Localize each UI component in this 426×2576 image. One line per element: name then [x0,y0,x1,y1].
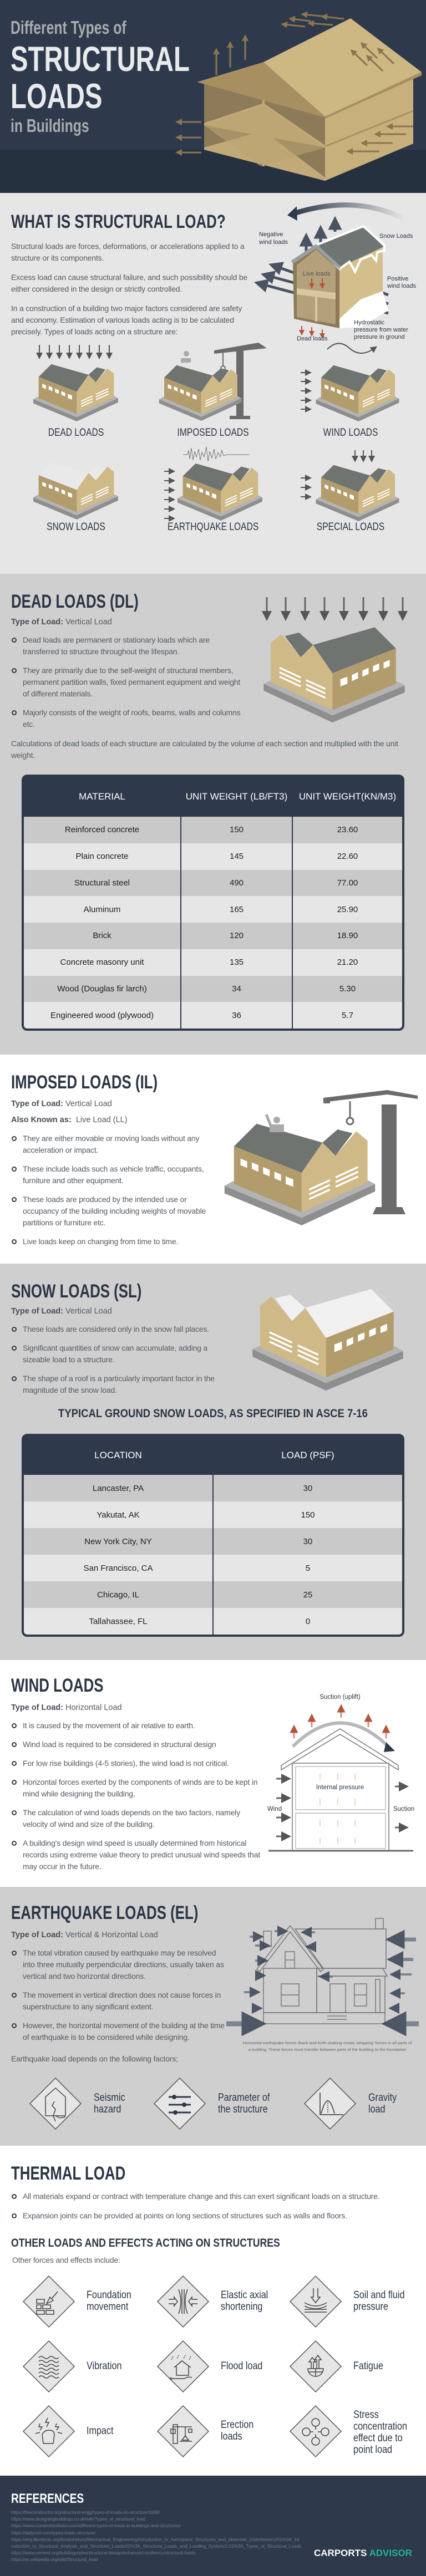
factor: gravity load: load [368,2104,386,2115]
table: snow loads: 5 [306,1564,310,1572]
bullets: thermal: Expansion joints can be provided at points on long sections of structures such as walls and floors. [23,2211,347,2220]
text: reference links: https://www.designingbuildings.co.uk/wiki/Types_of_structural_load [11,2516,145,2522]
item: vibration [23,2340,121,2392]
bullets: snow loads: Significant quantities of snow can accumulate, adding a sizeable load to a structure. [23,1343,207,1364]
label: special loads: SPECIAL LOADS [317,521,384,533]
text block: definition [11,242,247,336]
item: elastic axial shortening: Elastic axial [221,2289,268,2301]
bullets: dead loads: They are primarily due to the self-weight of structural members, permanent partition walls, fixed permanent equipment and weight of different materials. [23,666,240,698]
table: unit weights: Structural steel [74,878,130,888]
bullets: wind loads: The calculation of wind loads depends on the two factors, namely velocity of wind and size of the building. [23,1808,240,1829]
factor: parameter of the structure: Parameter of [218,2092,270,2104]
table: snow loads: Chicago, IL [97,1590,139,1599]
table: unit weights: UNIT WEIGHT (LB/FT3) [186,791,287,802]
diagram: wind pressure house: Suction [393,1806,414,1813]
bullets: imposed loads: They are either movable or moving loads without any acceleration or impact. [23,1134,199,1154]
heading: dead loads: DEAD LOADS (DL) [11,591,139,612]
diagram: house with load labels: wind loads [387,283,416,289]
table: unit weights: 22.60 [337,852,358,861]
subheading: ground snow loads: TYPICAL GROUND SNOW LOADS, AS SPECIFIED IN ASCE 7-16 [58,1407,368,1420]
diagram: earthquake house: Horizontal earthquake forces (back-and-forth shaking croats 'whipping' forces in all parts of [243,2040,412,2045]
label: snow loads: SNOW LOADS [47,521,105,533]
text: type of load: Type of Load: Vertical Load [11,618,112,627]
diagram: wind pressure house: Internal pressure [316,1784,364,1791]
icon: imposed loads [159,343,267,421]
table: unit weights: 145 [230,852,244,861]
factor: seismic hazard [29,2078,125,2130]
diagram: house with load labels [254,202,416,342]
text block: definition: Structural loads are forces, deformations, or accelerations applied to a structure or its components. [11,242,245,262]
item: stress concentration: point load [353,2444,392,2456]
text: reference links: https://en.wikipedia.org/wiki/Structural_load [11,2557,98,2562]
item: soil and fluid pressure [290,2275,404,2328]
diagram: house with load labels: Snow Loads [379,233,413,240]
diagram: wind pressure house: Wind [267,1806,282,1813]
text block: definition: In a construction of a building two major factors considered are safety and economy. Estimation of various loads acting is to be calculated precisely. Types of loads acting on a structure are: [11,304,242,336]
bullets: imposed loads: Live loads keep on changing from time to time. [23,1237,178,1246]
bullets: wind loads [12,1721,261,1871]
illustration: imposed building with crane [224,1090,418,1225]
label: imposed loads: IMPOSED LOADS [177,427,248,439]
item: impact [23,2405,113,2457]
diagram: house with load labels: Hydrostatic [354,319,385,326]
heading: wind loads: WIND LOADS [11,1675,104,1696]
bullets: earthquake: However, the horizontal movement of the building at the time of earthquake is to be considered while designing. [23,2021,225,2042]
table: snow loads: 30 [303,1537,312,1546]
table: snow loads: 0 [306,1617,310,1626]
table: snow loads: San Francisco, CA [83,1564,153,1572]
title: in Buildings [11,115,89,136]
item: elastic axial shortening: shortening [221,2301,262,2313]
heading: what is structural load: WHAT IS STRUCTURAL LOAD? [11,211,226,232]
title: Different Types of [11,17,126,38]
text: factors intro: Earthquake load depends on the following factors; [11,2054,178,2063]
item: flood load: Flood load [221,2360,262,2372]
item: vibration: Vibration [87,2360,121,2372]
section: what is structural load [0,193,426,574]
heading: snow loads: SNOW LOADS (SL) [11,1281,141,1302]
bullets: thermal [12,2192,380,2220]
text: type of load: Type of Load: Vertical Load [11,1307,112,1316]
table: unit weights: UNIT WEIGHT(KN/M3) [299,791,396,802]
bullets: wind loads: Wind load is required to be considered in structural design [23,1740,216,1749]
text: reference links: https://www.cement.org/buildingcodes/structural-design/enhanced-resiliency/structural-loads [11,2550,195,2555]
bullets: wind loads: For low rise buildings (4-5 stories), the wind load is not critical. [23,1759,229,1768]
factor: gravity load [304,2078,397,2130]
bullets: imposed loads: These include loads such as vehicle traffic, occupants, furniture and other equipment. [23,1164,204,1185]
table: unit weights: Brick [93,931,111,940]
text: reference links: https://dailycivil.com/types-loads-structure/ [11,2530,95,2536]
item: foundation movement: movement [87,2301,128,2313]
item: erection loads [157,2405,253,2457]
table: snow loads: Yakutat, AK [97,1510,140,1519]
table: snow loads [22,1434,404,1637]
item: fatigue [290,2340,383,2392]
bullets: dead loads: Majorly consists of the weight of roofs, beams, walls and columns etc. [23,708,240,729]
illustration: snow building [252,1289,403,1391]
table: snow loads: 30 [303,1484,312,1493]
title: STRUCTURAL [11,40,190,79]
table: unit weights [22,775,404,1031]
diagram: earthquake house: a building. These forces must transfer between parts of the building to the foundation [248,2047,406,2052]
item: soil and fluid pressure: Soil and fluid [353,2289,404,2301]
title [11,17,190,136]
item: foundation movement [23,2275,131,2328]
icon: earthquake loads [164,447,262,521]
heading: thermal load: THERMAL LOAD [11,2163,125,2184]
table: unit weights: 18.90 [337,931,358,940]
table: unit weights: 34 [232,984,241,994]
table: snow loads: Tallahassee, FL [89,1617,148,1626]
diagram: earthquake house [226,1918,419,2052]
table: unit weights: 77.00 [337,878,358,888]
text: type and alias: Type of Load: Vertical Load [11,1099,112,1108]
item: elastic axial shortening [157,2275,268,2328]
table: unit weights: MATERIAL [79,791,125,802]
footer: references [0,2476,426,2576]
table: snow loads: 25 [303,1590,312,1599]
bullets: earthquake: The total vibration caused by earthquake may be resolved into three mutually perpendicular directions, usually taken as vertical and two horizontal directions. [23,1948,224,1981]
bullets: thermal: All materials expand or contract with temperature change and this can exert significant loads on a structure. [23,2192,380,2201]
item: erection loads: loads [221,2431,242,2442]
table: unit weights: Reinforced concrete [65,825,139,834]
table: unit weights: 135 [230,958,244,967]
diagram: house with load labels: Dead loads [297,335,328,342]
illustration: dead loads building [262,597,408,722]
table: unit weights: 21.20 [337,958,358,967]
icon: special loads [301,450,399,521]
section: earthquake loads [0,1887,426,2146]
table: snow loads: New York City, NY [84,1537,152,1546]
bullets: imposed loads: These loads are produced by the intended use or occupancy of the building including weights of movable partitions or furniture etc. [23,1195,206,1227]
table: unit weights: 120 [230,931,244,940]
table: snow loads: LOAD (PSF) [281,1450,334,1460]
item: impact: Impact [87,2425,113,2437]
bullets: imposed loads [12,1134,206,1246]
table: snow loads: Lancaster, PA [93,1484,144,1493]
text: type and alias: Also Known as: Live Load (LL) [11,1116,128,1124]
text: calculation: Calculations of dead loads of each structure are calculated by the volume of each section and multiplied with the unit weight. [11,739,398,760]
icon: snow loads [33,467,118,520]
text: reference links: https://eng.libretexts.org/Bookshelves/Mechanical_Engineering/Introduction_to_Aerospace_Structures_and_Materials_(Alderliesten)/01%3A_Int [11,2537,300,2542]
diagram: house with load labels: pressure in ground [354,334,405,340]
table: unit weights: 5.7 [342,1011,353,1020]
item: stress concentration: concentration [353,2421,407,2432]
heading: earthquake loads: EARTHQUAKE LOADS (EL) [11,1902,198,1923]
section: snow loads [0,1264,426,1660]
item: foundation movement: Foundation [87,2289,131,2301]
text: type of load: Type of Load: Horizontal Load [11,1703,122,1712]
bullets: dead loads [12,635,241,729]
table: unit weights: 5.30 [339,984,356,994]
diagram: wind pressure house: Suction (uplift) [320,1694,361,1701]
table: unit weights: 36 [232,1011,241,1020]
bullets: snow loads: The shape of a roof is a particularly important factor in the magnitude of the snow load. [23,1374,215,1394]
bullets: wind loads: Horizontal forces exerted by the components of winds are to be kept in mind while designing the building. [23,1778,257,1798]
table: unit weights: 490 [230,878,244,888]
diagram: wind pressure house [267,1694,414,1852]
text: reference links: https://theconstructor.org/structural-engg/types-of-loads-on-structure/1698/ [11,2509,160,2515]
factor: gravity load: Gravity [368,2092,397,2104]
item: flood load [157,2340,262,2392]
table: unit weights: 23.60 [337,825,358,834]
header section [0,0,426,193]
bullets: wind loads: A building's design wind speed is usually determined from historical records using extreme value theory to predict unusual wind speeds that may occur in the future. [23,1839,260,1871]
diagram: house with load labels: Live loads [303,271,331,277]
item: stress concentration: effect due to [353,2432,403,2444]
text: reference links: roduction_to_Structural_Analysis_and_Structural_Loads/02%3A_Structural_Loads_and_Loading_System/2.01%3A_Types_of_Structural_Loads [11,2543,301,2549]
illustration: header house [175,11,422,181]
diagram: house with load labels: pressure from water [354,327,408,333]
label: wind loads: WIND LOADS [323,427,378,439]
item: soil and fluid pressure: pressure [353,2301,388,2313]
table: unit weights: Plain concrete [75,852,129,861]
subheading: other loads: OTHER LOADS AND EFFECTS ACTING ON STRUCTURES [11,2237,280,2249]
table: unit weights: Engineered wood (plywood) [50,1011,154,1020]
diagram: house with load labels: Negative [259,231,283,238]
table: unit weights: Aluminum [84,905,120,914]
text: other forces intro: Other forces and effects include: [12,2256,120,2264]
heading: references: REFERENCES [11,2491,84,2506]
icon: dead loads [33,345,118,421]
logo: carports advisor: CARPORTS ADVISOR [314,2548,412,2558]
table: unit weights: 150 [230,825,244,834]
table: unit weights: Concrete masonry unit [60,958,144,967]
grid: other loads [23,2275,407,2457]
label: dead loads: DEAD LOADS [48,427,104,439]
factor: parameter of the structure: the structure [218,2104,268,2115]
factor: seismic hazard: Seismic [94,2092,125,2104]
heading: imposed loads: IMPOSED LOADS (IL) [11,1072,158,1093]
item: fatigue: Fatigue [353,2360,383,2372]
bullets: earthquake [12,1948,225,2042]
item: stress concentration [290,2405,407,2457]
label: earthquake loads: EARTHQUAKE LOADS [168,521,258,533]
table: unit weights: 25.90 [337,905,358,914]
icon: wind loads [301,343,399,421]
bullets: dead loads: Dead loads are permanent or stationary loads which are transferred to structure throughout the lifespan. [23,635,210,656]
section: dead loads [0,574,426,1055]
bullets: snow loads [12,1325,215,1394]
factor: seismic hazard: hazard [94,2104,121,2115]
text block: definition: Excess load can cause structural failure, and such possibility should be either considered in the design or strictly controlled. [11,273,247,293]
table: unit weights: Wood (Douglas fir larch) [57,984,147,994]
bullets: earthquake: The movement in vertical direction does not cause forces in superstructure to any significant extent. [23,1990,221,2011]
text: reference links: https://www.constrofacilitator.com/different-types-of-loads-in-buildings-and-structures/ [11,2523,181,2528]
bullets: snow loads: These loads are considered only in the snow fall places. [23,1325,209,1333]
table: snow loads: 150 [301,1510,315,1519]
table: unit weights: 165 [230,905,244,914]
text: reference links [11,2509,301,2562]
text: type and alias [11,1099,128,1124]
diagram: house with load labels: Positive [387,276,409,282]
bullets: wind loads: It is caused by the movement of air relative to earth. [23,1721,195,1730]
title: LOADS [11,77,102,116]
diagram: house with load labels: wind loads [258,239,288,246]
text: type of load: Type of Load: Vertical & Horizontal Load [11,1931,158,1939]
table: snow loads: LOCATION [94,1450,142,1460]
item: stress concentration: Stress [353,2409,379,2421]
factor: parameter of the structure [154,2078,270,2130]
item: erection loads: Erection [221,2419,253,2431]
